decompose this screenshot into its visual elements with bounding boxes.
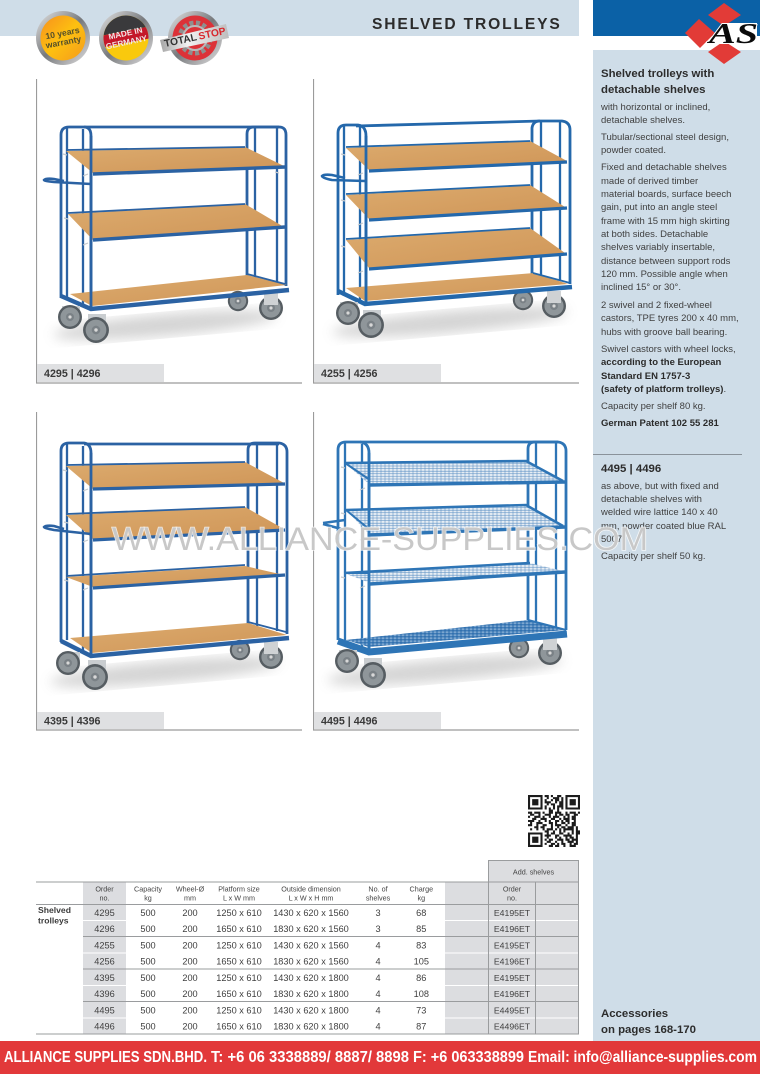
footer contact bar: F: +6 063338899 — [413, 1049, 524, 1066]
sidebar text: patent: German Patent 102 55 281 — [601, 418, 719, 429]
wire shelf 1 — [345, 461, 565, 485]
product number label: 4395 | 4396 — [44, 716, 101, 728]
row 4395: 4395 — [94, 973, 115, 983]
row 4495: E4495ET — [494, 1006, 531, 1016]
sidebar heading: 4495 | 4496: 4495 | 4496 — [601, 463, 661, 475]
table column headers — [95, 884, 522, 902]
row 4255: 4 — [375, 940, 381, 950]
table column headers: Platform size — [218, 884, 260, 894]
row 4396: E4196ET — [494, 989, 531, 999]
sidebar text: wheel locks: according to the European — [601, 357, 721, 368]
row 4255: 500 — [140, 940, 156, 950]
row 4396: 500 — [140, 989, 156, 999]
row 4495 — [94, 1006, 531, 1016]
table grey columns — [83, 860, 579, 1034]
row 4496: 200 — [182, 1022, 198, 1032]
footer contact bar — [0, 1041, 760, 1074]
row 4295: E4195ET — [494, 908, 531, 918]
shelf 2 — [346, 185, 567, 220]
sidebar text: shelves: inclined 15° or 30°. — [601, 282, 681, 293]
table column headers: L x W mm — [223, 894, 255, 902]
row 4396: 200 — [182, 989, 198, 999]
sidebar text: wire variant — [601, 481, 726, 545]
badge: 10 years warranty — [36, 11, 90, 65]
table column headers: no. — [100, 894, 110, 902]
row 4256: 4256 — [94, 957, 115, 967]
table column headers: kg — [418, 894, 425, 902]
row 4255 — [94, 940, 531, 950]
product number label: 4255 | 4256 — [321, 368, 378, 380]
row 4296: 1650 x 610 — [216, 924, 262, 934]
table column headers: shelves — [366, 894, 391, 902]
badges — [36, 11, 229, 65]
row 4496: 4 — [375, 1022, 381, 1032]
badge: made in Germany: MADE IN — [108, 26, 143, 42]
sidebar text: design — [601, 132, 729, 156]
table column headers: Outside dimension — [281, 884, 341, 894]
row 4496: 500 — [140, 1022, 156, 1032]
table column headers: L x W x H mm — [289, 894, 333, 902]
sidebar text: shelves: gain, put into an angle steel — [601, 202, 717, 213]
wire deck — [338, 620, 567, 652]
row 4295: 200 — [182, 908, 198, 918]
accessories note: Accessories — [601, 1008, 668, 1020]
shadow — [326, 649, 564, 691]
row 4295: 1430 x 620 x 1560 — [273, 908, 349, 918]
product number label — [314, 712, 441, 729]
row 4395: 500 — [140, 973, 156, 983]
shelf 2 — [68, 204, 285, 240]
row 4395: 86 — [416, 973, 426, 983]
sidebar text: shelves — [601, 162, 731, 293]
accessories note: on pages 168-170 — [601, 1024, 696, 1036]
sidebar text: shelves: made of derived timber — [601, 176, 698, 187]
sidebar text: shelves: Fixed and detachable shelves — [601, 162, 727, 173]
row 4295: 1250 x 610 — [216, 908, 262, 918]
sidebar text: shelves: distance between support rods — [601, 256, 730, 267]
row 4395: 200 — [182, 973, 198, 983]
sidebar text: wheel locks: Swivel castors with wheel locks, — [601, 344, 736, 355]
row 4396: 4 — [375, 989, 381, 999]
panel: trolley 4255 | 4256 — [313, 79, 579, 384]
row 4295: 68 — [416, 908, 426, 918]
row 4495: 4 — [375, 1006, 381, 1016]
badge: total stop: TOTALSTOP — [163, 26, 227, 50]
deck — [338, 273, 572, 304]
product number label: 4295 | 4296 — [44, 368, 101, 380]
row 4495: 500 — [140, 1006, 156, 1016]
sidebar text: intro: with horizontal or inclined, — [601, 102, 710, 112]
handle — [44, 526, 91, 534]
row 4496: 4496 — [94, 1022, 115, 1032]
sidebar text: wire variant: welded wire lattice 140 x 40 — [601, 507, 718, 518]
sidebar text: shelves: frame with 15 mm high skirting — [601, 216, 730, 227]
deck — [61, 274, 289, 309]
sidebar text: wheel locks: (safety of platform trolleys). — [601, 384, 726, 395]
row 4496: 1830 x 620 x 1800 — [273, 1022, 349, 1032]
panel: trolley 4495 | 4496 — [313, 412, 579, 731]
accessories note — [601, 1008, 696, 1036]
row 4296 — [94, 924, 531, 934]
sidebar text: shelves: at both sides. Detachable — [601, 229, 708, 240]
row 4255: 1430 x 620 x 1560 — [273, 940, 349, 950]
sidebar text: wire variant: as above, but with fixed and — [601, 481, 719, 492]
sidebar text: castors: 2 swivel and 2 fixed-wheel — [601, 300, 712, 311]
sidebar text: castors: castors, TPE tyres 200 x 40 mm, — [601, 313, 739, 324]
badge: made in Germany: GERMANY — [105, 34, 148, 51]
trolley illustration — [322, 121, 572, 338]
badge: made in Germany — [99, 11, 153, 66]
wire shelf 2 — [346, 505, 565, 535]
blue header block — [593, 0, 760, 36]
trolley illustration — [44, 443, 289, 690]
row 4496: 1650 x 610 — [216, 1022, 262, 1032]
row 4396 — [94, 989, 531, 999]
sidebar text: wheel locks — [601, 344, 736, 395]
handle — [44, 179, 91, 184]
row 4495: 1250 x 610 — [216, 1006, 262, 1016]
row 4295: 3 — [375, 908, 381, 918]
deck — [61, 622, 289, 656]
row 4496 — [94, 1022, 531, 1032]
row 4296: 500 — [140, 924, 156, 934]
sidebar panel — [593, 50, 760, 1041]
QR code — [528, 795, 580, 847]
trolley illustration — [323, 442, 567, 688]
table column headers: Order — [503, 884, 522, 894]
heading: shelved trolleys: SHELVED TROLLEYS — [372, 16, 562, 33]
row label: Shelved — [38, 905, 71, 915]
table column headers: kg — [144, 894, 152, 902]
row 4255: 4255 — [94, 940, 115, 950]
logo: AS: AS — [706, 19, 758, 50]
row 4296: E4196ET — [494, 924, 531, 934]
table column headers: Capacity — [134, 884, 162, 894]
logo: AS — [685, 3, 758, 64]
sidebar text: capacity: Capacity per shelf 80 kg. — [601, 401, 706, 412]
sidebar text: wire variant: detachable shelves with — [601, 494, 702, 505]
row label: trolleys — [38, 916, 69, 926]
table column headers: No. of — [368, 884, 388, 894]
row 4396: 108 — [414, 989, 429, 999]
row 4395: 1430 x 620 x 1800 — [273, 973, 349, 983]
shelf 1 — [66, 147, 285, 174]
row 4296: 1830 x 620 x 1560 — [273, 924, 349, 934]
row 4256: 4 — [375, 957, 381, 967]
row 4256: 500 — [140, 957, 156, 967]
row 4295 — [94, 908, 531, 918]
row 4495: 73 — [416, 1006, 426, 1016]
handle — [322, 175, 365, 181]
shelf 2 — [66, 507, 285, 540]
row 4296: 3 — [375, 924, 381, 934]
badge: 10 years warranty: 10 years — [45, 25, 80, 41]
row 4495: 4495 — [94, 1006, 115, 1016]
wire shelf 3 — [344, 563, 565, 584]
sidebar text: shelves: shelves variably insertable, — [601, 242, 715, 253]
shelf 3 — [346, 228, 567, 269]
sidebar text: intro: detachable shelves. — [601, 115, 685, 126]
handle — [323, 520, 345, 530]
shelf 3 — [66, 565, 285, 588]
shadow — [331, 301, 569, 343]
sidebar text: wire capacity: Capacity per shelf 50 kg. — [601, 551, 706, 562]
row 4296: 200 — [182, 924, 198, 934]
watermark: WWW.ALLIANCE-SUPPLIES.COM — [112, 521, 648, 557]
row 4256: 105 — [414, 957, 429, 967]
row 4256: E4196ET — [494, 957, 531, 967]
sidebar text: wire variant: 5007. — [601, 534, 625, 545]
sidebar text: design: powder coated. — [601, 145, 666, 156]
sidebar text: wheel locks: Standard EN 1757-3 — [601, 371, 690, 382]
add. shelves header: Add. shelves — [513, 868, 554, 876]
footer contact bar: T: +6 06 3338889/ 8887/ 8898 — [211, 1049, 409, 1066]
row 4395 — [94, 973, 531, 983]
row 4395: E4195ET — [494, 973, 531, 983]
sidebar text: intro — [601, 102, 710, 126]
table column headers: no. — [507, 894, 517, 902]
product number label: 4495 | 4496 — [321, 716, 378, 728]
sidebar text: shelves: material boards, surface beech — [601, 189, 731, 200]
badge: total stop — [160, 11, 229, 65]
row 4396: 1650 x 610 — [216, 989, 262, 999]
panel: trolley 4295 | 4296 — [36, 79, 302, 384]
shelf 1 — [66, 462, 285, 489]
sidebar text: castors — [601, 300, 739, 338]
row 4256: 1650 x 610 — [216, 957, 262, 967]
product number label — [37, 364, 164, 382]
product number label — [37, 712, 164, 729]
table column headers: mm — [184, 894, 196, 902]
table column headers: Order — [95, 884, 114, 894]
row 4256: 200 — [182, 957, 198, 967]
product table — [36, 860, 579, 1034]
row 4396: 1830 x 620 x 1800 — [273, 989, 349, 999]
sidebar heading: Shelved trolleys with — [601, 68, 714, 80]
sidebar heading: detachable shelves — [601, 84, 705, 96]
row 4255: E4195ET — [494, 940, 531, 950]
sidebar text: wire variant: mm, powder coated blue RAL — [601, 521, 726, 532]
sidebar text: design: Tubular/sectional steel design, — [601, 132, 729, 143]
row 4295: 4295 — [94, 908, 115, 918]
panel: trolley 4395 | 4396 — [36, 412, 302, 731]
sidebar heading — [601, 68, 714, 96]
row 4496: E4496ET — [494, 1022, 531, 1032]
header band — [0, 0, 579, 36]
table column headers: Wheel-Ø — [176, 884, 205, 894]
shelf 1 — [346, 141, 567, 171]
row 4496: 87 — [416, 1022, 426, 1032]
sidebar divider — [593, 454, 742, 455]
row 4255: 83 — [416, 940, 426, 950]
sidebar text: castors: hubs with groove ball bearing. — [601, 327, 727, 338]
shadow — [52, 304, 278, 346]
row 4296: 85 — [416, 924, 426, 934]
row 4256: 1830 x 620 x 1560 — [273, 957, 349, 967]
row 4256 — [94, 957, 531, 967]
row 4295: 500 — [140, 908, 156, 918]
row 4495: 200 — [182, 1006, 198, 1016]
trolley illustration — [44, 127, 289, 343]
row 4395: 4 — [375, 973, 381, 983]
row 4296: 4296 — [94, 924, 115, 934]
row 4255: 200 — [182, 940, 198, 950]
sidebar text: shelves: 120 mm. Possible angle when — [601, 269, 728, 280]
badge: 10 years warranty: warranty — [44, 34, 82, 51]
product number label — [314, 364, 441, 382]
footer contact bar: ALLIANCE SUPPLIES SDN.BHD. — [4, 1049, 207, 1066]
row 4495: 1430 x 620 x 1800 — [273, 1006, 349, 1016]
row 4395: 1250 x 610 — [216, 973, 262, 983]
row 4255: 1250 x 610 — [216, 940, 262, 950]
table column headers: Charge — [410, 884, 433, 894]
shadow — [49, 651, 281, 693]
row 4396: 4396 — [94, 989, 115, 999]
